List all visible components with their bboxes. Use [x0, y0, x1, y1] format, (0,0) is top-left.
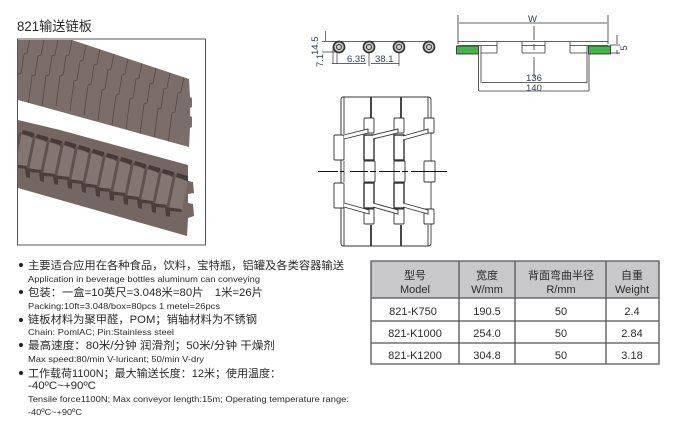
- bullet 4: Max speed:80/min V-luricant; 50/min V-dry: [28, 354, 205, 364]
- table rows: [388, 306, 643, 362]
- bullet 2: 包装：一盒=10英尺=3.048米=80片 1米=26片: [28, 285, 263, 299]
- table header text: R/mm: [546, 284, 576, 296]
- table header text: [400, 268, 649, 296]
- table header text: 宽度: [476, 268, 498, 282]
- table rows: 821-K1000: [388, 328, 442, 340]
- bullet 3: 链板材料为聚甲醛，POM；销轴材料为不锈钢: [28, 312, 257, 326]
- chain top-view drawing: [318, 97, 447, 246]
- green side guides: [456, 46, 610, 54]
- table header text: 型号: [404, 268, 426, 282]
- table rows: 50: [555, 350, 567, 362]
- sprocket circles: [334, 42, 434, 52]
- bullet 4: [19, 338, 275, 364]
- table rows: 2.84: [621, 328, 643, 340]
- dimension labels: cross-section: 136: [526, 73, 542, 84]
- table rows: 2.4: [624, 306, 640, 318]
- bullet 2: Packing:10ft=3.048/box=80pcs 1 metel=26pcs: [28, 301, 220, 311]
- bullet 1: 主要适合应用在各种食品，饮料，宝特瓶，铝罐及各类容器输送: [28, 258, 344, 272]
- table rows: 821-K750: [389, 306, 437, 318]
- panel: product photo: [11, 38, 206, 245]
- table rows: 3.18: [621, 350, 643, 362]
- dimension labels: side profile: 38.1: [375, 54, 394, 65]
- table rows: 190.5: [473, 306, 501, 318]
- specification table: [371, 261, 659, 364]
- bullet 5: [19, 366, 349, 417]
- photo: ribbed belt underside: [11, 120, 194, 236]
- bullet 3: [19, 312, 257, 337]
- dimension labels: side profile: 14.5: [310, 36, 321, 55]
- bullet 5: -40ºC~+90ºC: [28, 380, 96, 392]
- table header text: Weight: [615, 284, 649, 296]
- dimension labels: side profile: 6.35: [347, 54, 366, 65]
- bullet 5: -40ºC~+90ºC: [28, 407, 82, 417]
- table rows: 821-K1200: [388, 350, 442, 362]
- table header text: Model: [400, 284, 430, 296]
- bullet 1: [19, 258, 344, 284]
- table grid: [371, 261, 659, 364]
- dimension labels: cross-section: 140: [526, 83, 542, 94]
- bullet 1: Application in beverage bottles aluminum can conveying: [28, 274, 260, 284]
- bullet 4: 最高速度：80米/分钟 润滑剂；50米/分钟 干燥剂: [28, 338, 275, 352]
- table rows: 50: [555, 306, 567, 318]
- bullet 5: Tensile force1100N; Max conveyor length:15m; Operating temperature range:: [28, 394, 349, 404]
- bullet 3: Chain: PomlAC; Pin:Stainless steel: [28, 327, 174, 337]
- bullet 5: 工作载荷1100N；最大输送长度：12米；使用温度：: [28, 366, 281, 380]
- table header text: 自重: [621, 268, 643, 282]
- table rows: 304.8: [473, 350, 501, 362]
- side profile drawing: [322, 31, 434, 66]
- bullet 2: [19, 285, 263, 311]
- dimension labels: side profile: 7.1: [315, 54, 326, 67]
- table rows: 50: [555, 328, 567, 340]
- table header background: [371, 261, 659, 298]
- cross-section drawing: [456, 15, 620, 91]
- dimension labels: cross-section: [526, 14, 630, 94]
- table rows: 254.0: [473, 328, 501, 340]
- title: 821输送链板: [17, 19, 92, 34]
- bullet list: features: [19, 258, 349, 417]
- dimension labels: side profile: [310, 36, 394, 67]
- table header text: W/mm: [471, 284, 503, 296]
- photo: flat belt top: [14, 38, 192, 147]
- dimension labels: cross-section: W: [528, 14, 537, 25]
- table header text: 背面弯曲半径: [528, 268, 594, 282]
- dimension labels: cross-section: 5: [619, 45, 630, 51]
